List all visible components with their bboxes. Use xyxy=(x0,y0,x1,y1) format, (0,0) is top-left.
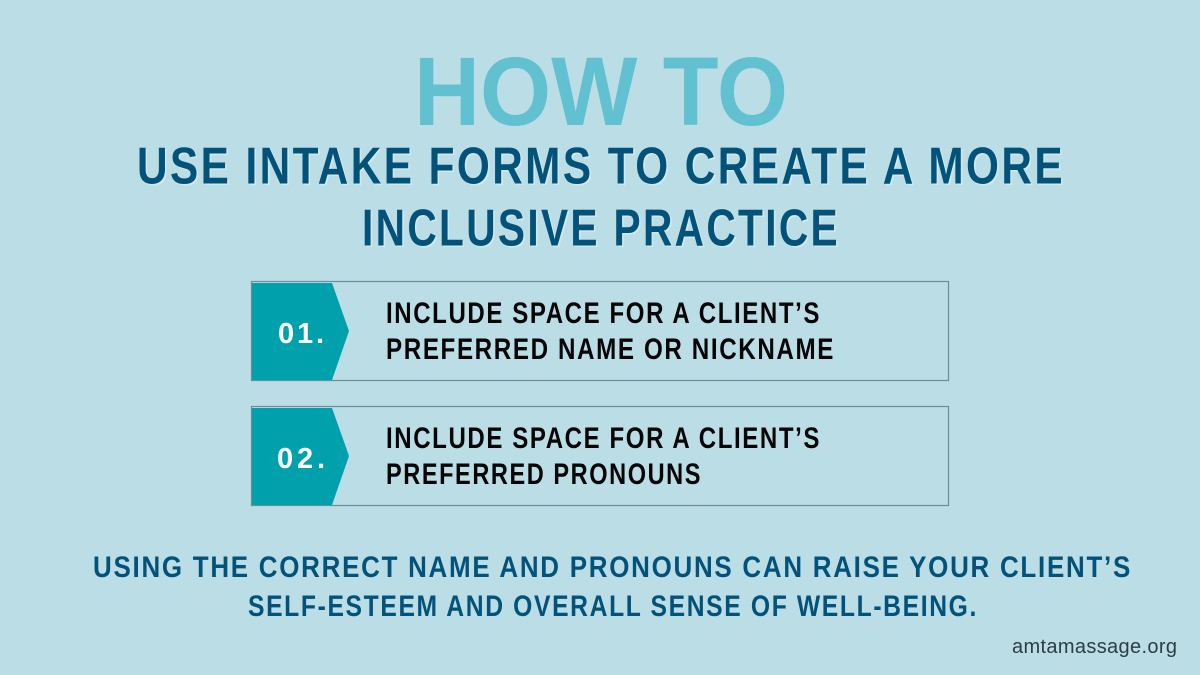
step 1 number: 01. xyxy=(278,318,324,350)
panel: step 1 xyxy=(252,282,948,380)
icon: step 2 number tag xyxy=(252,408,349,505)
title: how to: HOW TO xyxy=(414,37,788,146)
text block: closing statement: SELF-ESTEEM AND OVERALL SENSE OF WELL-BEING. xyxy=(248,590,978,623)
step 2 text: INCLUDE SPACE FOR A CLIENT’S xyxy=(386,422,821,455)
step 1 text xyxy=(386,297,835,366)
step 2 text xyxy=(386,422,821,491)
panel: step 2 xyxy=(252,406,948,506)
step 1 text: PREFERRED NAME OR NICKNAME xyxy=(386,333,835,366)
icon: step 1 number tag xyxy=(252,283,349,380)
text block: closing statement xyxy=(93,551,1132,623)
source url: amtamassage.org xyxy=(1012,636,1177,658)
step 1 text: INCLUDE SPACE FOR A CLIENT’S xyxy=(386,297,821,330)
heading: subtitle: INCLUSIVE PRACTICE xyxy=(362,200,840,258)
heading: subtitle xyxy=(137,138,1066,259)
step 2 number: 02. xyxy=(277,443,325,475)
heading: subtitle: INCLUSIVE PRACTICE xyxy=(364,201,842,259)
step 2 text: PREFERRED PRONOUNS xyxy=(386,458,702,491)
